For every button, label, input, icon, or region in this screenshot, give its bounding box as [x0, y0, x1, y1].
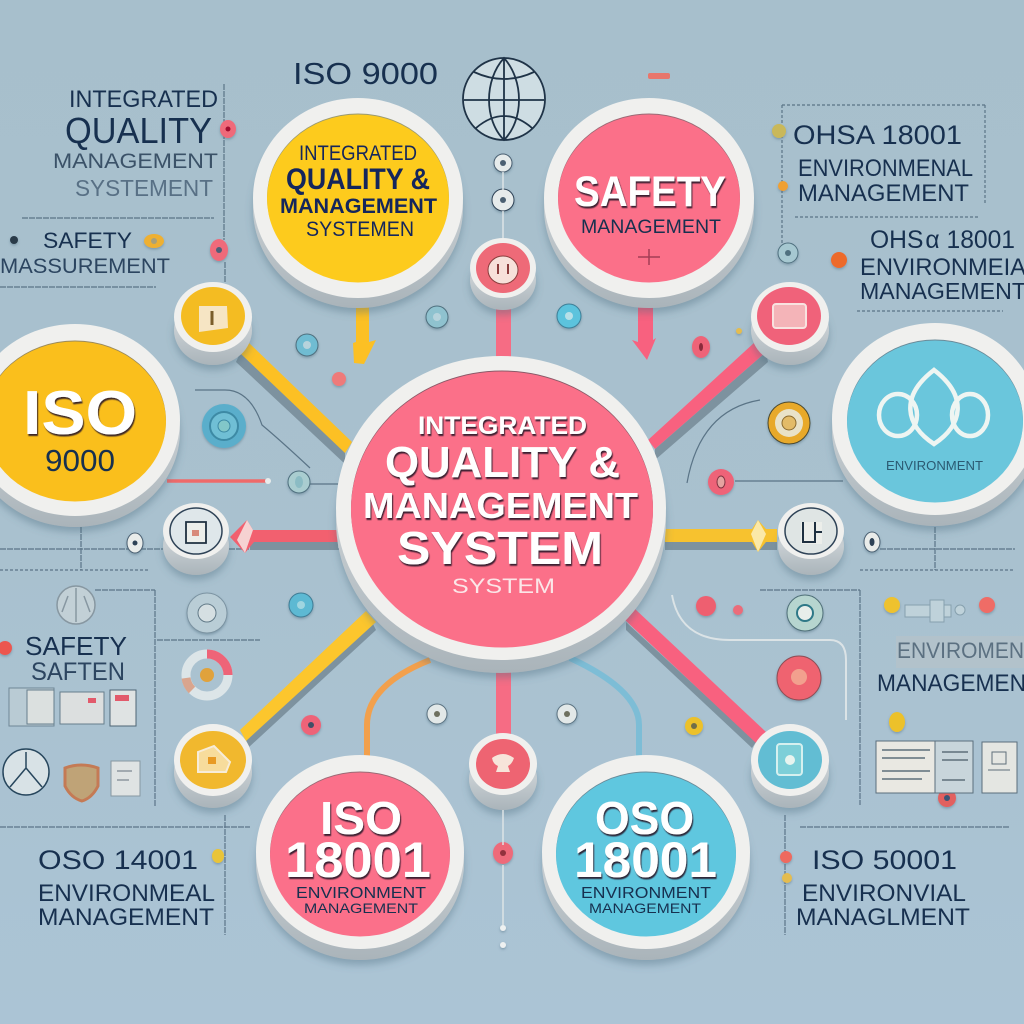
connector: yellow arrow from quality circle [353, 302, 376, 364]
connector: thin pink left [167, 478, 271, 484]
icon: donut chart [186, 654, 228, 696]
connector: pink arrow from safety circle [632, 302, 656, 360]
label: environment tiny text: ENVIRONMENT [886, 458, 983, 473]
circle: OSO 18001 blue: OSO [595, 792, 694, 844]
connector: right yellow [665, 520, 777, 552]
node: top pink [470, 238, 536, 310]
circle: central hub: MANAGEMENT [363, 485, 638, 526]
circle: central hub [336, 356, 666, 673]
text block: OHSA: OHSA 18001 [793, 120, 962, 150]
circle: central hub: INTEGRATED [418, 412, 587, 440]
connector: left pink [230, 520, 338, 553]
circle: OSO 18001 blue [542, 755, 750, 960]
connector: vertical links top [502, 172, 504, 238]
icons: small dots [0, 120, 995, 948]
text block: integrated quality: SYSTEMENT [75, 175, 213, 201]
icon: infinity leaf outline [879, 370, 988, 444]
circle: ISO 18001 pink: 18001 [285, 832, 431, 888]
text block: integrated quality: MANAGEMENT [53, 150, 218, 173]
circle: safety pink [544, 98, 754, 308]
connector: pink bottom vertical [496, 664, 511, 738]
text block: OHS: OHS α 18001 [870, 226, 1015, 254]
circle: ISO 9000 yellow: ISO [23, 379, 137, 448]
panels: right document cards [876, 741, 1017, 793]
circle: environment blue [832, 323, 1024, 526]
text block: OHS: ENVIRONMEIA [860, 254, 1024, 281]
connector: pink to bottom-right node [625, 608, 766, 748]
text block: OSO 14001: ENVIRONMEAL [38, 880, 215, 907]
text block: ISO 50001: MANAGLMENT [796, 904, 970, 931]
text block: ISO 50001: ENVIRONVIAL [802, 880, 966, 907]
circle: integrated quality yellow: SYSTEMEN [306, 218, 414, 241]
text block: integrated quality: INTEGRATED [69, 86, 218, 113]
circle: OSO 18001 blue: MANAGEMENT [589, 900, 701, 916]
text block: safety measurement: SAFETY [43, 228, 132, 253]
node: left white [163, 503, 229, 575]
circle: central hub: SYSTEM [397, 522, 603, 574]
text block: environment right [877, 636, 1024, 697]
icon: card [111, 761, 140, 796]
text block: OHSA: ENVIRONMENAL [798, 155, 973, 182]
circle: ISO 18001 pink: MANAGEMENT [304, 900, 419, 916]
circle: safety pink: SAFETY [574, 168, 726, 216]
circle: integrated quality yellow [253, 98, 463, 308]
text block: safety left: SAFTEN [31, 658, 125, 686]
connector: yellow to top-left node [236, 342, 352, 464]
circle: central hub: QUALITY & [385, 438, 620, 487]
panels: left document cards [9, 688, 136, 726]
circle: safety pink: MANAGEMENT [581, 217, 721, 238]
icon: triad emblem [3, 749, 49, 795]
node: top-right pink [751, 282, 829, 365]
circle: integrated quality yellow: INTEGRATED [299, 142, 417, 165]
circle: integrated quality yellow: QUALITY & [286, 163, 430, 196]
mark: small red flag [648, 73, 670, 79]
text block: OSO 14001 [38, 845, 215, 931]
node: bottom-right blue [751, 724, 829, 808]
icon: shield [65, 765, 98, 801]
icon: globe [463, 58, 545, 140]
connector: pink to top-right node [648, 342, 768, 460]
icons: right row of pictograms [905, 600, 965, 622]
heading: ISO 9000: ISO 9000 [293, 56, 438, 91]
circle: ISO 18001 pink: ISO [320, 792, 402, 844]
circle: OSO 18001 blue: ENVIRONMENT [581, 885, 711, 902]
circle: ISO 18001 pink: ENVIRONMENT [296, 885, 426, 902]
text block: safety measurement: MASSUREMENT [0, 255, 170, 278]
text block: OHS: MANAGEMENT [860, 278, 1024, 304]
node: bottom pink [469, 733, 537, 810]
text block: OHSA: MANAGEMENT [798, 180, 969, 207]
text block: safety left [25, 631, 127, 686]
icon: medal outline [57, 586, 95, 624]
node: bottom-left yellow [174, 724, 252, 808]
connector: dotted vertical below bottom node [502, 810, 504, 925]
text block: integrated quality: QUALITY [65, 110, 212, 151]
connector: thin curve right [672, 595, 846, 720]
text block: ISO 50001 [796, 845, 970, 931]
circle: ISO 9000 yellow [0, 324, 180, 527]
circle: ISO 18001 pink [256, 755, 464, 960]
connector: thin blue [570, 658, 639, 757]
connector: yellow to bottom-left node [240, 611, 376, 748]
text block: OHSA [793, 120, 973, 207]
text block: safety left: SAFETY [25, 631, 127, 661]
text block: safety measurement [0, 228, 170, 278]
text block: OSO 14001: OSO 14001 [38, 845, 198, 875]
circle: integrated quality yellow: MANAGEMENT [280, 195, 437, 218]
text block: ISO 50001: ISO 50001 [812, 845, 957, 875]
circle: ISO 9000 yellow: 9000 [45, 443, 115, 478]
text block: OHS [860, 226, 1024, 304]
connector: thin orange [367, 660, 430, 757]
connector: pink top vertical [496, 302, 511, 358]
node: top-left yellow [174, 282, 252, 365]
circle: central hub: SYSTEM [452, 575, 555, 598]
circle: OSO 18001 blue: 18001 [574, 832, 717, 888]
node: right white [778, 503, 844, 575]
text block: integrated quality [53, 86, 218, 201]
text block: OSO 14001: MANAGEMENT [38, 904, 214, 931]
